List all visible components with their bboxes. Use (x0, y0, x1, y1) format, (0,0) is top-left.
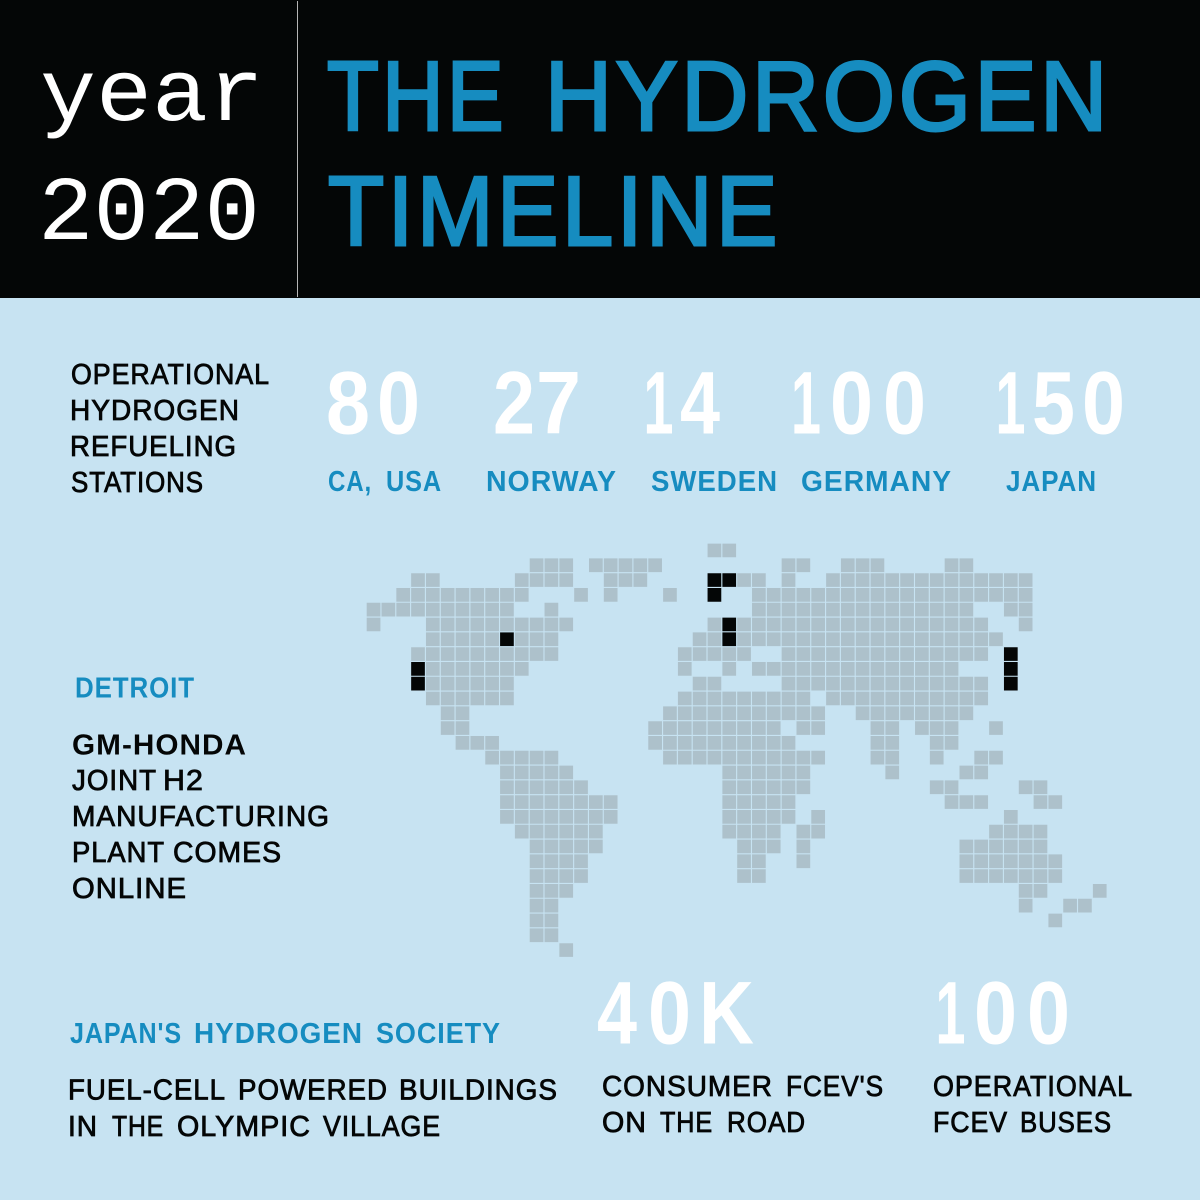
text block: fuel-cell buildings: POWERED (238, 1074, 388, 1106)
text block: fuel-cell buildings (68, 1074, 558, 1143)
text block: GM-Honda plant (72, 730, 330, 905)
text block: fuel-cell buildings: OLYMPIC (177, 1111, 311, 1143)
text block: GM-Honda plant: JOINT (72, 765, 157, 797)
title: HYDROGEN (545, 41, 1111, 151)
stat: California (326, 352, 442, 498)
stat: consumer FCEVs: THE (660, 1107, 713, 1139)
marker: Detroit (500, 638, 515, 640)
title (327, 41, 1111, 266)
heading: Japan's hydrogen society: HYDROGEN (194, 1018, 363, 1050)
stat: California: 0 (377, 352, 420, 452)
stat: FCEV buses (933, 962, 1133, 1139)
stat: FCEV buses: 1 (936, 962, 966, 1062)
stat: consumer FCEVs: FCEV'S (786, 1071, 884, 1103)
stat: Sweden: SWEDEN (651, 466, 778, 498)
stat: Sweden: 1 (644, 352, 674, 452)
markers: Norway stations (708, 580, 737, 595)
heading: operational hydrogen refueling stations: OPERATIONAL (71, 359, 270, 391)
text block: GM-Honda plant: MANUFACTURING (72, 801, 330, 833)
stat: Japan: 5 (1032, 352, 1075, 452)
title: TIMELINE (328, 156, 781, 266)
heading: operational hydrogen refueling stations (70, 359, 270, 499)
text block: GM-Honda plant: PLANT (72, 837, 165, 869)
text block: GM-Honda plant: H2 (163, 765, 204, 797)
heading: operational hydrogen refueling stations: REFUELING (70, 431, 237, 463)
world map (367, 550, 1108, 950)
stat: consumer FCEVs: ON (602, 1107, 647, 1139)
stat: FCEV buses: FCEV (933, 1107, 1008, 1139)
stat: consumer FCEVs: 4 (597, 962, 637, 1062)
text block: fuel-cell buildings: THE (112, 1111, 164, 1143)
stat: California: 8 (326, 352, 370, 452)
stat: Japan (996, 352, 1125, 498)
header band (0, 0, 1200, 298)
stat: California: USA (386, 466, 442, 498)
heading: operational hydrogen refueling stations: HYDROGEN (70, 395, 240, 427)
stat: Germany: 1 (791, 352, 821, 452)
stat: Germany: 0 (883, 352, 926, 452)
stat: Japan: JAPAN (1006, 466, 1097, 498)
stat: Germany: GERMANY (801, 466, 952, 498)
heading: operational hydrogen refueling stations: STATIONS (71, 467, 204, 499)
stat: Japan: 0 (1082, 352, 1125, 452)
stat: Norway (486, 352, 617, 498)
stat: FCEV buses: 0 (1027, 962, 1070, 1062)
text block: GM-Honda plant: GM-HONDA (72, 730, 247, 762)
stat: FCEV buses: BUSES (1020, 1107, 1112, 1139)
stat: consumer FCEVs (597, 962, 884, 1139)
markers: Japan stations (1004, 654, 1019, 684)
stat: FCEV buses: 0 (974, 962, 1017, 1062)
stat: Germany (791, 352, 952, 498)
stat: consumer FCEVs: 0 (648, 962, 691, 1062)
stat: Sweden: 4 (680, 352, 720, 452)
stat: Norway: 2 (493, 352, 535, 452)
heading: Japan's hydrogen society: SOCIETY (376, 1018, 501, 1050)
text block: fuel-cell buildings: VILLAGE (323, 1111, 441, 1143)
title: THE (327, 41, 507, 151)
stat: FCEV buses: OPERATIONAL (933, 1071, 1133, 1103)
year label: 2020 (38, 164, 260, 267)
text block: GM-Honda plant: ONLINE (72, 873, 187, 905)
markers: Germany stations (722, 624, 737, 639)
stat: consumer FCEVs: K (699, 962, 754, 1062)
stat: Norway: NORWAY (486, 466, 617, 498)
text block: fuel-cell buildings: BUILDINGS (399, 1074, 558, 1106)
year label: year (40, 48, 264, 147)
stat: Japan: 1 (996, 352, 1026, 452)
markers: California stations (411, 669, 426, 684)
text block: fuel-cell buildings: FUEL-CELL (68, 1074, 226, 1106)
year label (38, 48, 264, 267)
heading: Japan's hydrogen society (70, 1018, 501, 1050)
stat: Sweden (644, 352, 778, 498)
stat: California: CA, (328, 466, 372, 498)
stat: Germany: 0 (830, 352, 873, 452)
text block: fuel-cell buildings: IN (68, 1111, 98, 1143)
text block: GM-Honda plant: COMES (173, 837, 282, 869)
stat: Norway: 7 (536, 352, 581, 452)
heading: Detroit: DETROIT (75, 672, 195, 704)
stat: consumer FCEVs: CONSUMER (602, 1071, 773, 1103)
stat: consumer FCEVs: ROAD (727, 1107, 806, 1139)
heading: Japan's hydrogen society: JAPAN'S (70, 1018, 182, 1050)
